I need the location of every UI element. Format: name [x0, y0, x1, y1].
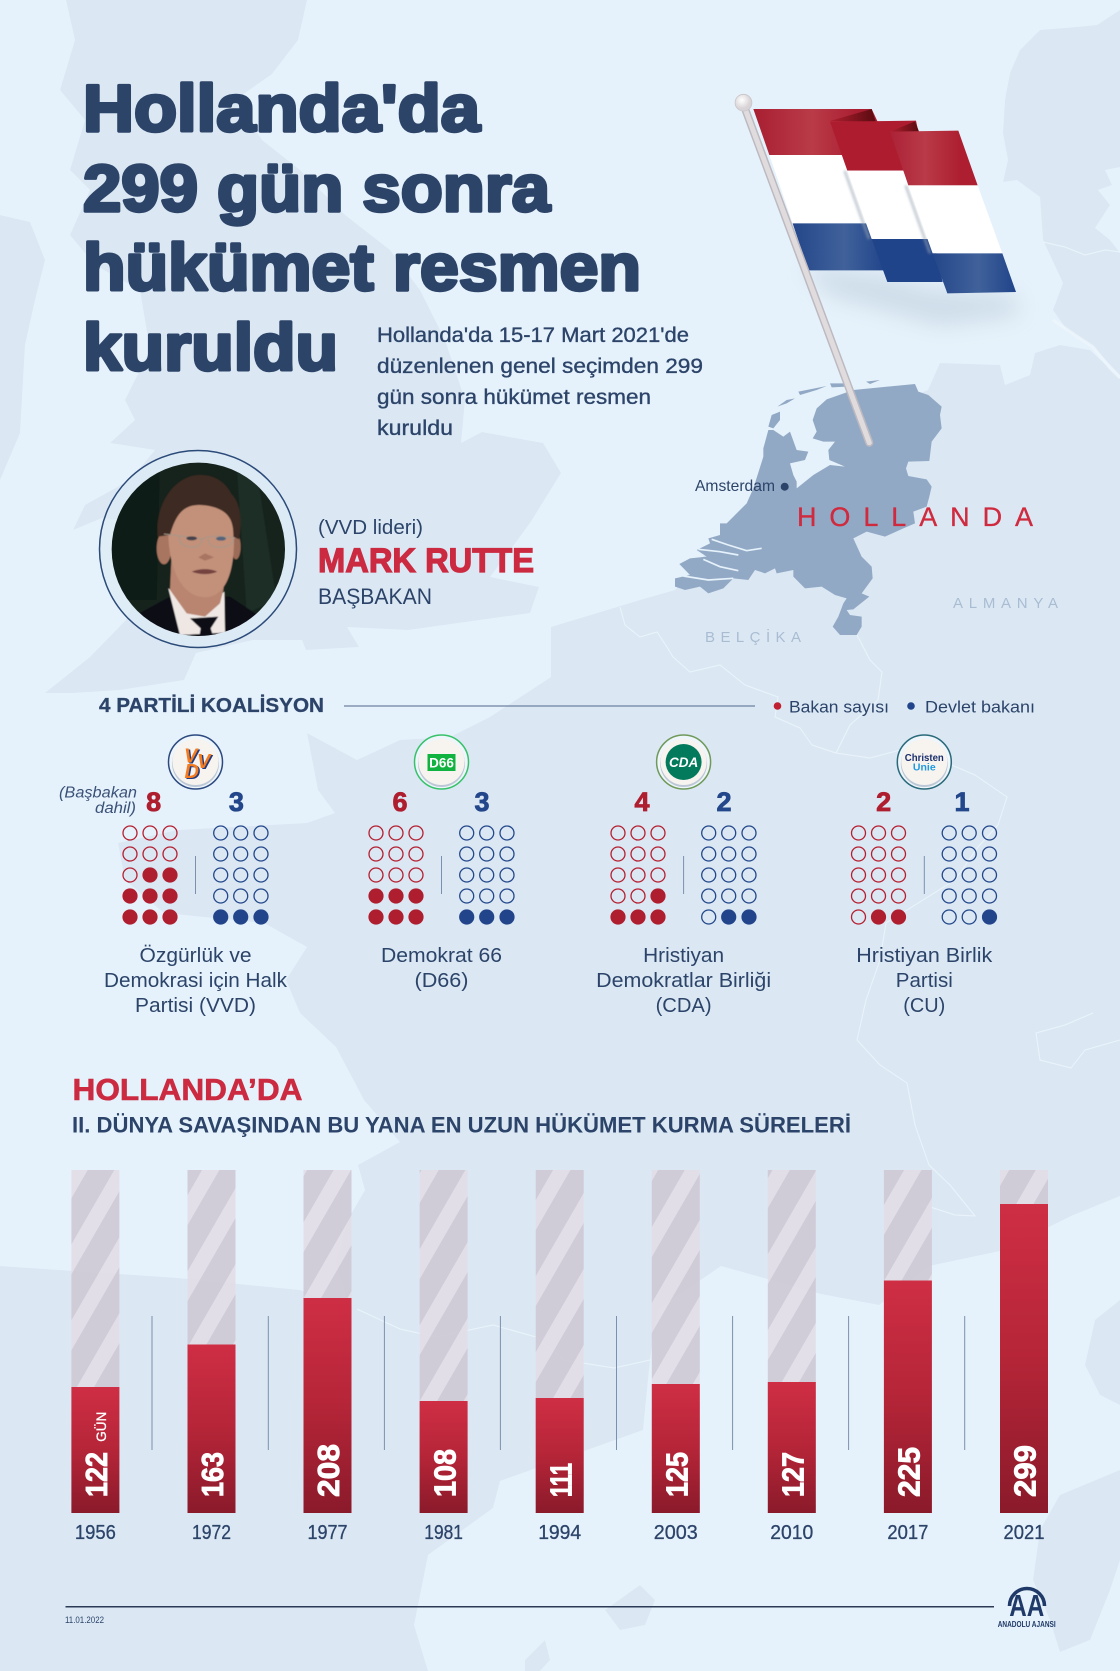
bar 1956 — [71, 1170, 119, 1544]
party: CDA — [596, 735, 771, 1017]
bar 1994 — [536, 1170, 584, 1544]
state minister dots — [702, 826, 757, 925]
Ireland land — [0, 215, 45, 480]
counts: 2 — [716, 787, 732, 817]
bar 2003: 2003 — [654, 1522, 698, 1544]
bar 2021: 299 — [1008, 1445, 1043, 1497]
icon: VVD logo: V — [186, 746, 200, 768]
portrait caption: MARK RUTTE — [318, 542, 534, 580]
counts: 2 — [876, 787, 891, 817]
bar 1972 — [188, 1170, 236, 1544]
flag fold 2 — [890, 121, 919, 132]
party: CU — [852, 735, 997, 1017]
bar 1977: 1977 — [308, 1522, 348, 1544]
icon: Anadolu Ajansı logo: ANADOLU AJANSI — [998, 1619, 1056, 1629]
note: Başbakan dahil: (Başbakan — [59, 784, 137, 802]
icon: VVD logo — [168, 735, 222, 789]
note: Başbakan dahil — [59, 784, 137, 817]
title: hükümet resmen — [83, 230, 641, 304]
icon: Christen Unie logo: Christen — [905, 752, 944, 764]
counts — [392, 787, 490, 817]
bar 1994: 1994 — [538, 1522, 581, 1544]
icon: CDA logo: CDA — [669, 755, 698, 770]
counts: 6 — [392, 787, 408, 817]
icon: D66 logo — [414, 735, 468, 789]
Jutland land — [1003, 10, 1120, 375]
date: 11.01.2022 — [65, 1615, 104, 1626]
bar 2017: 225 — [892, 1447, 927, 1497]
chart heading — [72, 1072, 851, 1138]
party name: (D66) — [414, 970, 468, 992]
bar 1977: 208 — [311, 1444, 346, 1497]
party name: Partisi (VVD) — [135, 995, 256, 1017]
counts — [146, 787, 244, 817]
icon: VVD logo: V — [184, 746, 199, 768]
party name: Hristiyan — [643, 945, 724, 967]
portrait caption: (VVD lideri) — [318, 517, 423, 539]
title: Hollanda'da — [83, 71, 481, 145]
title: 299 gün sonra — [83, 151, 551, 225]
bar 2017 — [884, 1170, 932, 1544]
bar 2003: 125 — [660, 1452, 694, 1497]
bar 1972: 163 — [195, 1452, 230, 1497]
party name: (CDA) — [656, 995, 712, 1017]
legend — [774, 698, 1035, 716]
intro text: Hollanda'da 15-17 Mart 2021'de — [377, 324, 689, 347]
bar chart — [71, 1170, 1048, 1544]
coalition heading: 4 PARTİLİ KOALİSYON — [99, 694, 324, 717]
party: D66 — [368, 735, 515, 992]
minister dots — [610, 826, 666, 925]
icon: D66 logo: D66 — [429, 756, 454, 770]
note: Başbakan dahil: dahil) — [95, 800, 136, 817]
party name: Demokratlar Birliği — [596, 970, 771, 992]
intro text — [377, 324, 703, 440]
map label: HOLLANDA: HOLLANDA — [797, 502, 1033, 532]
counts: 4 — [634, 787, 650, 817]
Great Britain land — [45, 0, 561, 693]
party name — [596, 945, 771, 1017]
bar 1994: 111 — [543, 1463, 578, 1497]
portrait caption: BAŞBAKAN — [318, 584, 432, 609]
flag panel 3 — [890, 131, 1016, 293]
minister dots — [122, 826, 178, 925]
Corsica — [1085, 1300, 1120, 1405]
state minister dots — [459, 826, 515, 925]
flag shadow — [800, 265, 1020, 325]
bar 2003 — [652, 1170, 700, 1544]
bar 2010 — [768, 1170, 816, 1544]
minister dots — [852, 826, 906, 925]
flag — [753, 109, 1016, 293]
Sardinia — [1033, 1470, 1120, 1652]
bar 1981 — [420, 1170, 468, 1544]
icon: VVD logo: V — [197, 751, 212, 773]
icon: VVD logo: D — [184, 761, 199, 783]
chart heading: II. DÜNYA SAVAŞINDAN BU YANA EN UZUN HÜKÜMET KURMA SÜRELERİ — [72, 1112, 851, 1138]
bar 1956: 1956 — [75, 1522, 116, 1544]
icon: Anadolu Ajansı logo — [998, 1588, 1056, 1629]
icon: Christen Unie logo — [897, 735, 951, 789]
party name: Demokrat 66 — [381, 945, 502, 967]
title — [83, 71, 641, 384]
party name: Özgürlük ve — [140, 945, 252, 967]
counts — [876, 787, 970, 817]
counts: 1 — [954, 787, 970, 817]
counts: 8 — [146, 787, 161, 817]
flag fold 1 — [830, 109, 876, 122]
bar 2021 — [1000, 1170, 1048, 1544]
state minister dots — [942, 826, 997, 925]
map label: ALMANYA: ALMANYA — [953, 595, 1058, 612]
country borders — [357, 242, 1120, 1368]
portrait: Mark Rutte — [100, 450, 296, 648]
legend: Devlet bakanı — [925, 698, 1035, 716]
map label: Amsterdam: Amsterdam — [695, 478, 775, 495]
bar 1972: 1972 — [192, 1522, 231, 1544]
intro text: gün sonra hükümet resmen — [377, 386, 651, 409]
party name: Demokrasi için Halk — [104, 970, 288, 992]
continental Europe land — [0, 345, 1120, 1671]
counts: 3 — [229, 787, 244, 817]
bar 2021: 2021 — [1004, 1522, 1044, 1544]
counts: 3 — [474, 787, 490, 817]
bar 1981: 1981 — [424, 1522, 463, 1544]
counts — [634, 787, 732, 817]
bar 1956: 122 — [79, 1452, 114, 1497]
Baltic inlet — [1095, 167, 1120, 253]
icon: CDA logo — [657, 735, 711, 789]
bar 2010: 2010 — [770, 1522, 813, 1544]
chart heading: HOLLANDA’DA — [72, 1072, 302, 1107]
title: kuruldu — [83, 310, 338, 384]
bar 2010: 127 — [776, 1452, 810, 1497]
portrait caption — [318, 517, 534, 609]
flag panel 2 — [830, 121, 943, 282]
map label: BELÇİKA: BELÇİKA — [705, 628, 801, 646]
party name: (CU) — [903, 995, 945, 1017]
party: VVD — [59, 735, 288, 1017]
map: Netherlands — [675, 380, 942, 635]
party name: Hristiyan Birlik — [856, 945, 993, 967]
icon: Anadolu Ajansı logo: AA — [1009, 1588, 1044, 1623]
bar 1981: 108 — [427, 1449, 462, 1497]
bar separators — [152, 1316, 965, 1450]
bar 2017: 2017 — [887, 1522, 928, 1544]
flag panel 1 — [753, 109, 893, 270]
bar 1956: GÜN — [92, 1412, 109, 1442]
intro text: düzenlenen genel seçimden 299 — [377, 355, 703, 378]
minister dots — [368, 826, 424, 925]
flag pole — [735, 94, 869, 443]
bar 1977 — [304, 1170, 352, 1544]
party name: Partisi — [896, 970, 953, 992]
party name — [381, 945, 502, 992]
icon: Christen Unie logo: Unie — [913, 762, 936, 774]
legend: Bakan sayısı — [789, 698, 889, 716]
intro text: kuruldu — [377, 417, 453, 440]
party name — [856, 945, 993, 1017]
icon: VVD logo: V — [198, 752, 214, 774]
flag with pole — [735, 94, 1020, 443]
icon: VVD logo: D — [186, 762, 200, 784]
state minister dots — [213, 826, 269, 925]
footer rule — [66, 1606, 994, 1608]
party name — [104, 945, 288, 1017]
Balearic Islands — [525, 1585, 655, 1671]
